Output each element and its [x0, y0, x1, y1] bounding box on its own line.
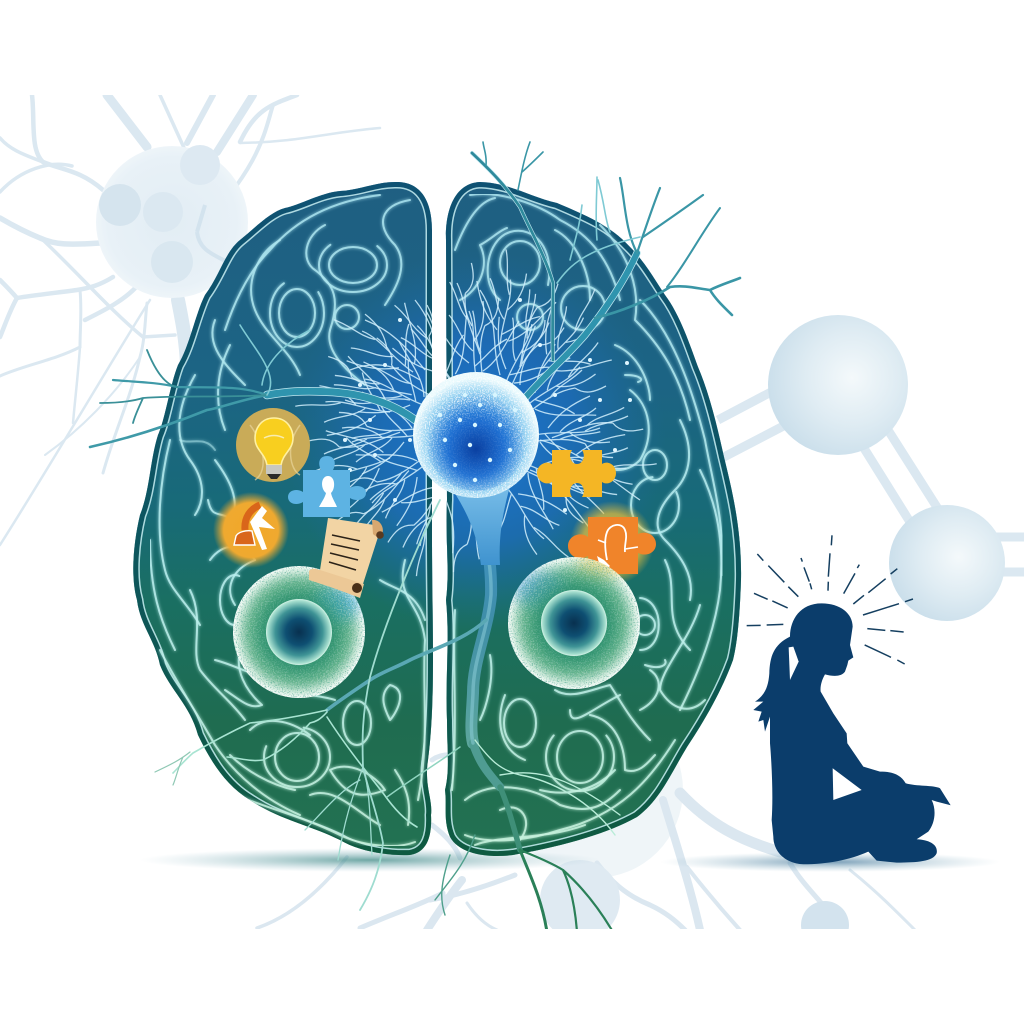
background molecule, right	[718, 315, 1024, 621]
icon: yellow puzzle piece	[537, 450, 616, 497]
ground shadow, silhouette	[660, 852, 1000, 872]
axon	[471, 490, 491, 743]
dendrites and axon of central neuron	[90, 142, 740, 932]
right hemisphere	[445, 182, 741, 856]
hemisphere outlines	[133, 182, 741, 856]
central neuron cell body	[413, 372, 539, 565]
brain folds	[150, 194, 722, 846]
right dendrite tree	[472, 142, 740, 398]
icon: orange face puzzle piece	[568, 501, 656, 585]
meditating silhouette	[747, 535, 951, 864]
fine blue dendrites around soma	[295, 249, 657, 576]
left dendrite tree	[90, 325, 425, 447]
radiating lines	[747, 535, 913, 664]
sparkle dots	[343, 298, 632, 512]
icon: blue puzzle piece	[288, 456, 366, 517]
ground shadow, brain	[140, 848, 600, 872]
icon: light bulb	[236, 408, 310, 482]
background neuron, top left	[0, 95, 380, 545]
right green cell	[508, 553, 640, 689]
background neuron cell body	[96, 145, 248, 298]
left hemisphere	[133, 182, 433, 855]
lower axon branches	[155, 500, 620, 915]
icon: parchment scroll	[309, 518, 384, 598]
icon: orange badge	[213, 492, 289, 568]
brain	[130, 180, 750, 860]
background neuron, bottom	[255, 752, 916, 929]
central blue glow	[308, 274, 644, 616]
left green cell	[233, 566, 365, 698]
